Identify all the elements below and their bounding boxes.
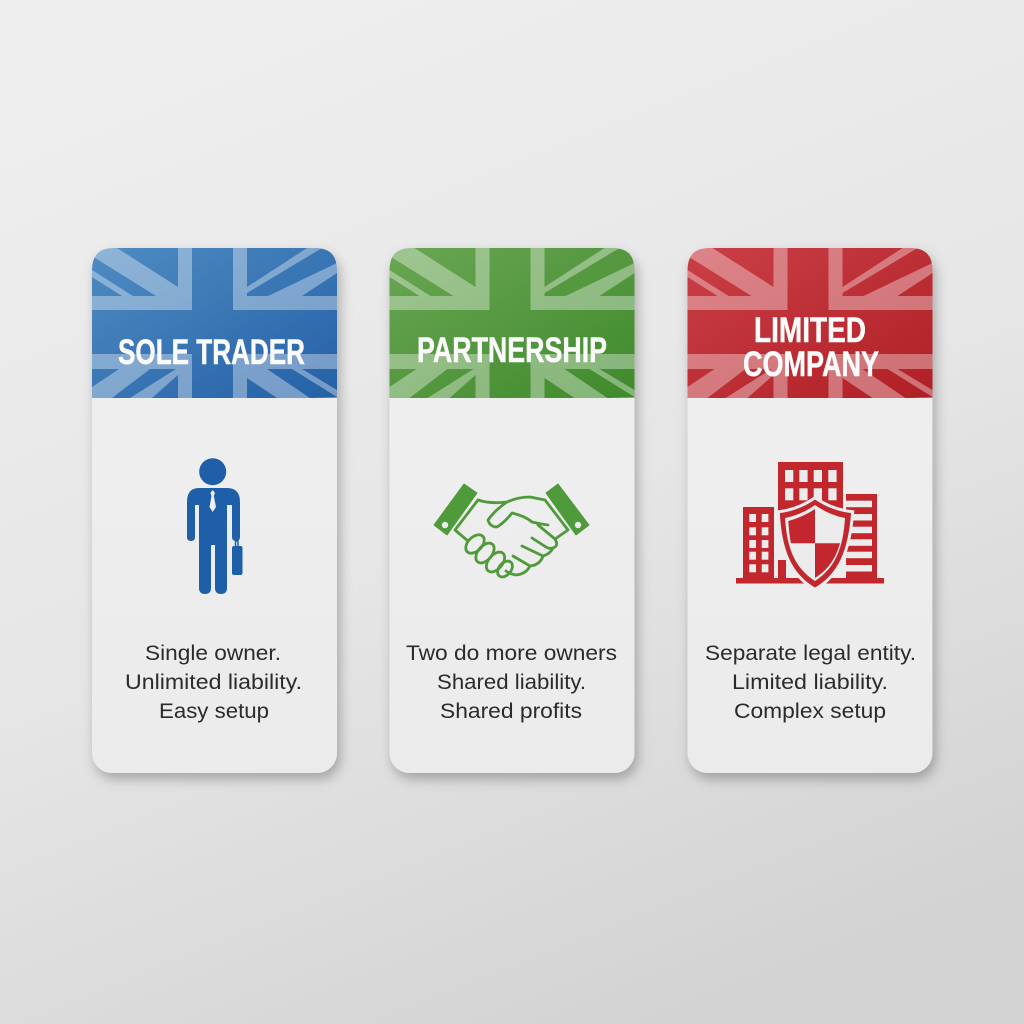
icon: handshake <box>434 484 589 580</box>
description: limited company <box>705 641 916 723</box>
description: partnership <box>406 641 617 723</box>
description: sole trader <box>125 641 302 723</box>
flag header: limited company <box>688 248 932 398</box>
description: partnership: Two do more owners <box>406 641 617 665</box>
flag header: partnership <box>390 248 634 398</box>
flag header: sole trader <box>92 248 337 398</box>
panel: limited company <box>688 248 932 773</box>
description: sole trader: Easy setup <box>159 699 269 723</box>
description: sole trader: Single owner. <box>145 641 281 665</box>
card body: limited company <box>688 248 932 773</box>
heading: limited company: LIMITED <box>754 311 866 350</box>
icon: buildings with shield <box>736 462 884 589</box>
description: limited company: Complex setup <box>734 699 886 723</box>
description: partnership: Shared liability. <box>437 670 586 694</box>
heading: limited company <box>743 311 879 384</box>
icon: businessman with briefcase <box>187 458 242 594</box>
panel: partnership <box>390 248 634 773</box>
heading: sole trader: SOLE TRADER <box>118 333 305 372</box>
panel: sole trader <box>92 248 337 773</box>
description: partnership: Shared profits <box>440 699 582 723</box>
description: limited company: Limited liability. <box>732 670 888 694</box>
card body: sole trader <box>92 248 337 773</box>
description: sole trader: Unlimited liability. <box>125 670 302 694</box>
card body: partnership <box>390 248 634 773</box>
heading: limited company: COMPANY <box>743 345 879 384</box>
heading: partnership: PARTNERSHIP <box>417 331 607 370</box>
description: limited company: Separate legal entity. <box>705 641 916 665</box>
